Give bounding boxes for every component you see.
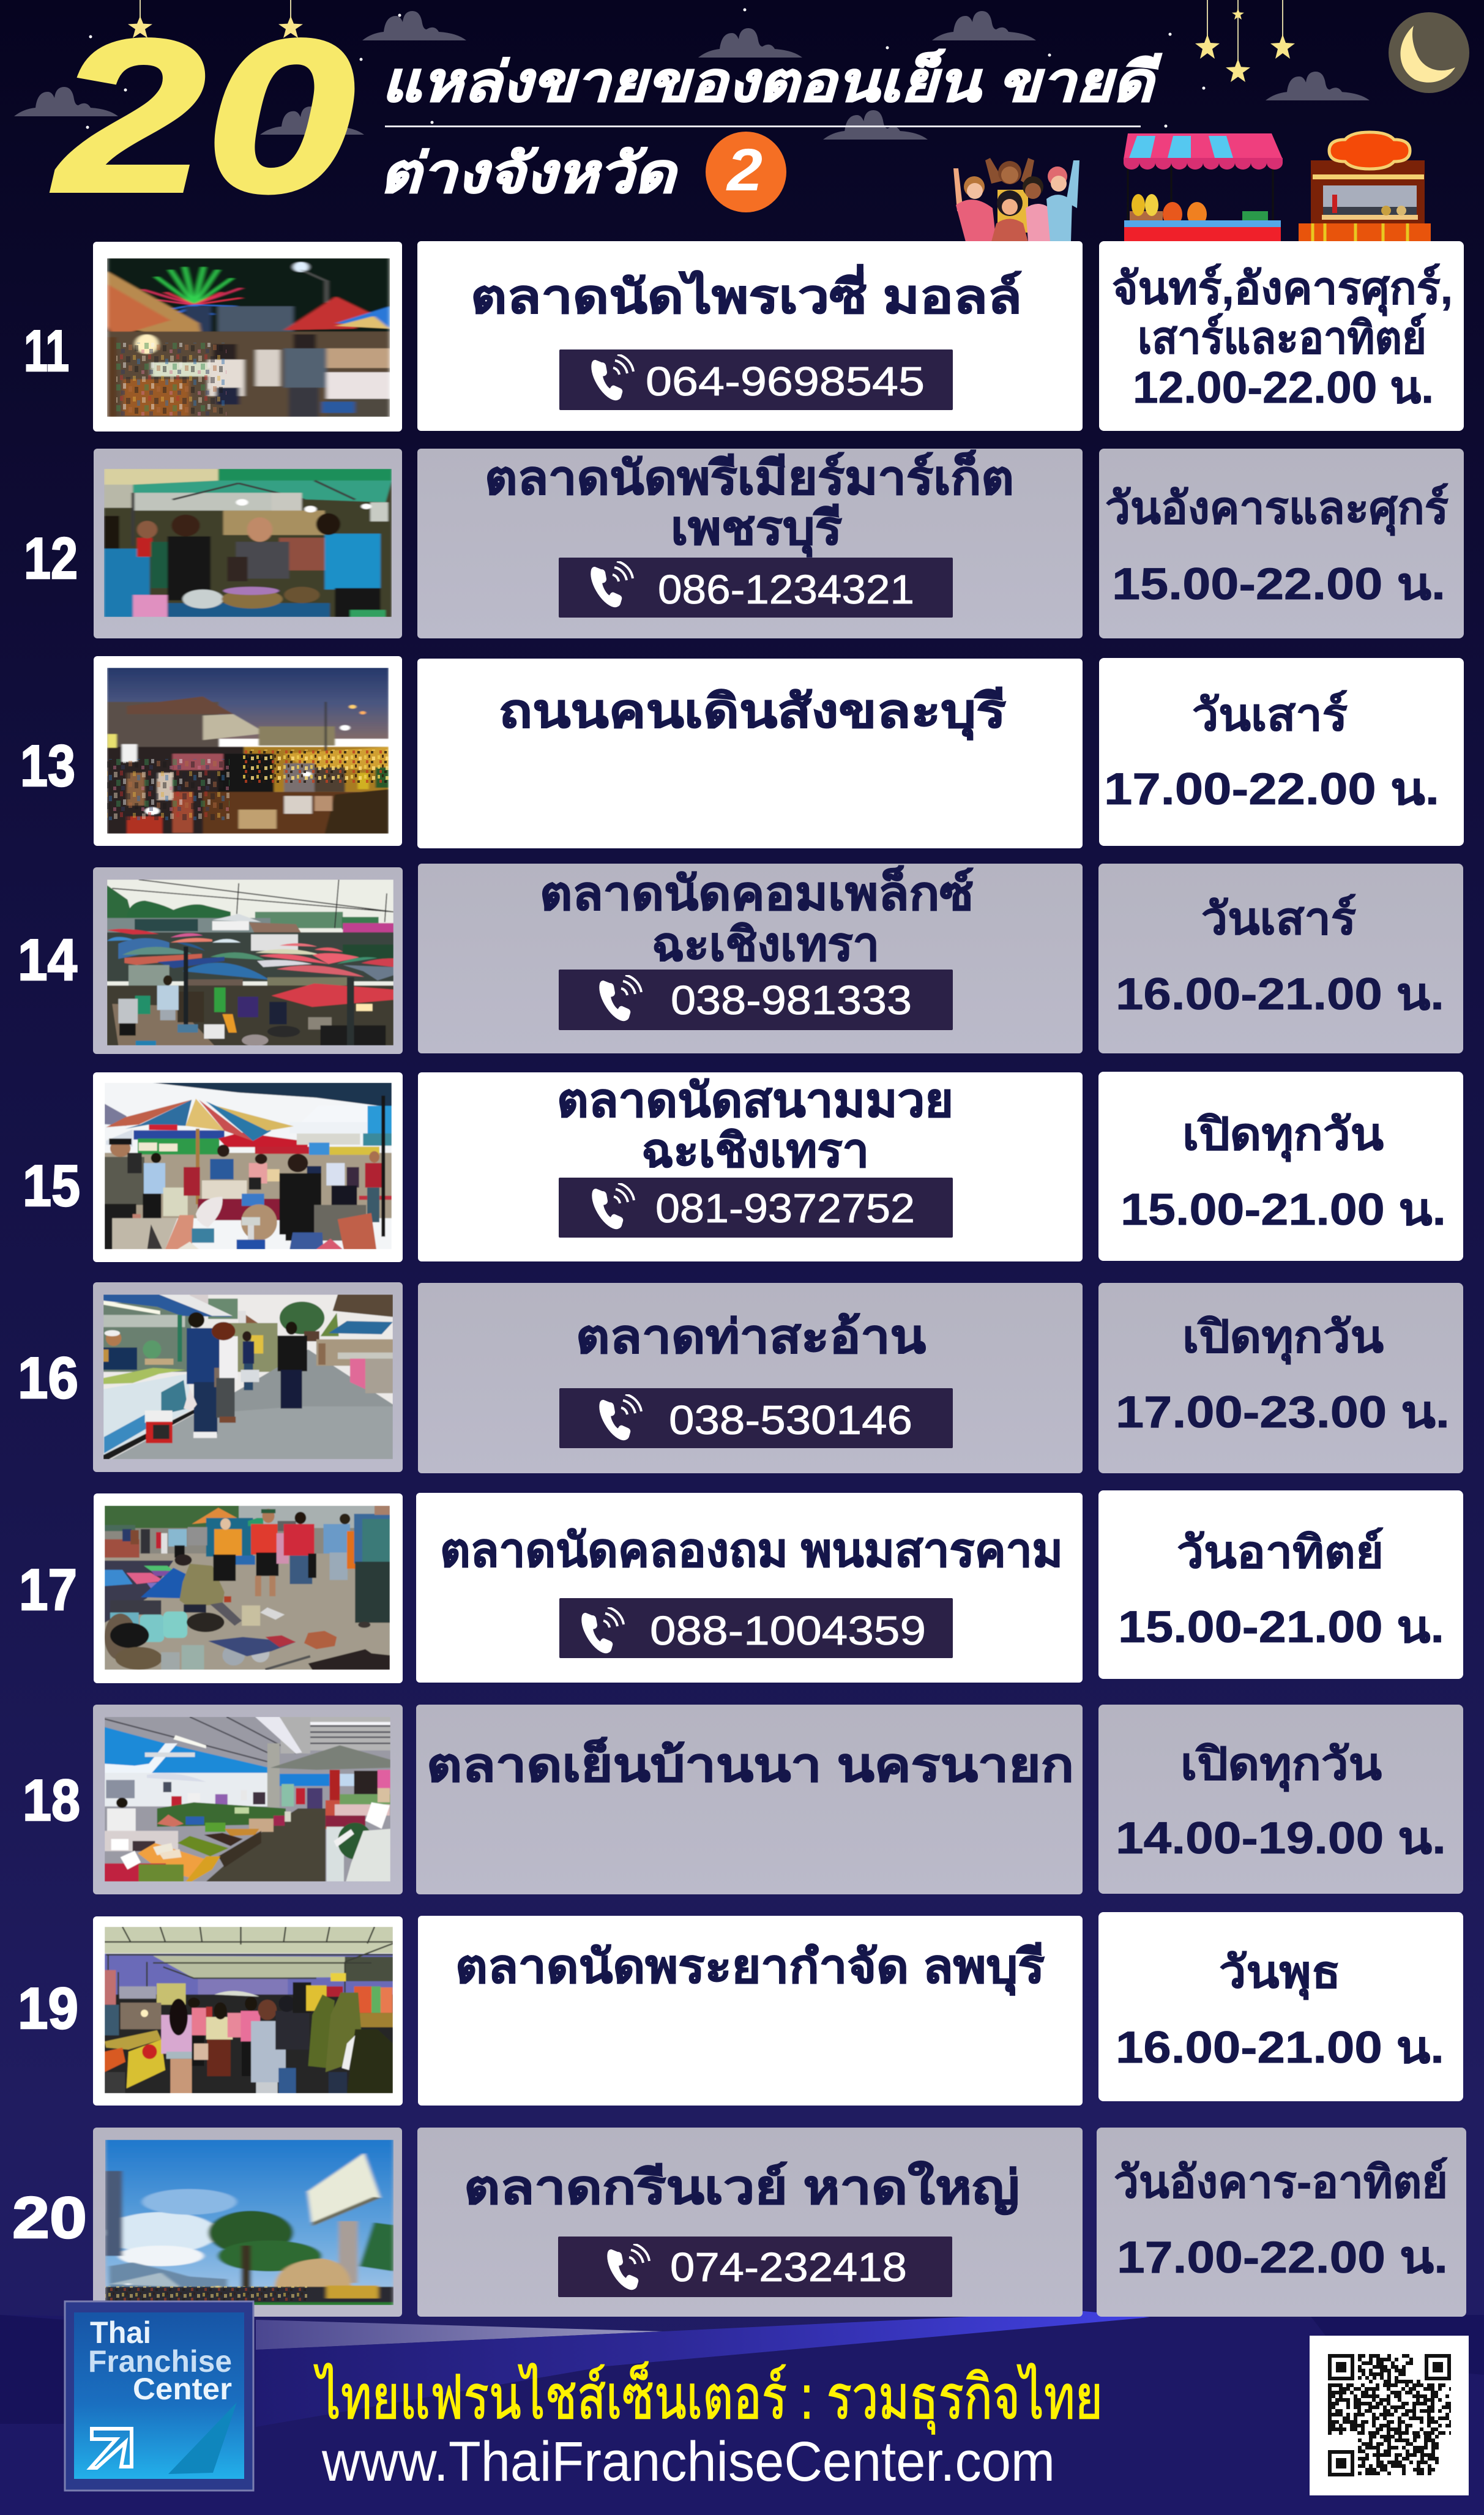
title card 16 [418,1283,1083,1473]
schedule card 15: 15.00-21.00 น. [1120,1185,1446,1235]
schedule card 19: 16.00-21.00 น. [1116,2023,1444,2072]
title card 18 [416,1705,1083,1894]
schedule card 12: 15.00-22.00 น. [1112,559,1445,609]
hanging stars right [1195,0,1295,82]
title line 1: แหล่งขายของตอนเย็น ขายดี [381,49,1162,113]
title card 20 [417,2128,1083,2317]
number 20: 20 [12,2185,87,2251]
row 19 [18,1912,1463,2106]
schedule card 20: วันอังคาร-อาทิตย์ [1114,2158,1448,2207]
icon: fruit stall [1124,133,1283,242]
number 14: 14 [18,927,77,993]
row 13 [20,656,1464,848]
market name 16: ตลาดท่าสะอ้าน [576,1311,926,1363]
part number badge [706,132,786,212]
schedule card 19: วันพุธ [1219,1948,1341,2000]
phone bar 16 [559,1388,953,1448]
phone bar 14 [559,970,953,1030]
market name 12 line 1: ตลาดนัดพรีเมียร์มาร์เก็ต [485,450,1014,504]
photo: stalls along a paved walkway [103,1295,393,1459]
title card 14 [418,864,1083,1053]
photo: walking street at dusk [107,668,389,834]
market name 12 line 2: เพชรบุรี [671,503,842,558]
row 17 [19,1490,1463,1683]
row 18 [23,1705,1463,1894]
logo: Thai Franchise Center [65,2301,253,2491]
market name 13: ถนนคนเดินสังขละบุรี [499,686,1006,741]
photo card 14 [93,867,403,1054]
schedule card 11 [1099,241,1464,431]
logo: Thai Franchise Center: Thai [90,2315,151,2350]
photo card 20 [93,2128,402,2317]
phone bar 12 [559,558,953,618]
number 11: 11 [24,318,69,384]
phone bar 12: 086-1234321 [658,567,914,613]
footer slogan: ไทยแฟรนไชส์เซ็นเตอร์ : รวมธุรกิจไทย [314,2361,1103,2435]
schedule card 16: 17.00-23.00 น. [1116,1388,1450,1437]
hanging stars left [128,0,303,38]
phone bar 17: 088-1004359 [650,1608,926,1654]
schedule card 15 [1098,1072,1463,1261]
phone bar 11 [559,349,953,410]
schedule card 19 [1098,1912,1463,2101]
market name 11: ตลาดนัดไพรเวซี่ มอลล์ [471,264,1022,323]
phone bar 20 [558,2237,952,2297]
schedule card 20 [1097,2128,1466,2317]
photo card 18 [93,1705,403,1894]
phone bar 16: 038-530146 [669,1397,912,1443]
schedule card 13 [1099,658,1464,846]
photo: market with colourful umbrellas [107,880,393,1045]
icon: moon [1389,12,1469,93]
schedule card 18 [1098,1705,1463,1894]
title card 13 [417,659,1083,848]
decorative clouds [14,9,1370,140]
photo card 12 [94,449,402,638]
schedule card 17: วันอาทิตย์ [1177,1528,1384,1577]
title card 15 [418,1072,1083,1261]
title line 2: ต่างจังหวัด [379,143,678,204]
photo: night market with ferris wheel [107,258,390,417]
photo: evening clothing market under canopy [105,1927,393,2093]
photo: market with rainbow umbrella [105,1083,392,1249]
schedule card 14: 16.00-21.00 น. [1116,970,1444,1019]
footer website url: www.ThaiFranchiseCenter.com [321,2431,1055,2493]
schedule card 11: จันทร์,อังคารศุกร์, [1112,264,1453,316]
number 13: 13 [20,733,75,799]
photo: flea market on the road [105,1506,390,1670]
row 16 [18,1282,1463,1473]
market name 15 line 2: ฉะเชิงเทรา [641,1125,869,1177]
number 12: 12 [24,526,78,591]
photo card 13 [94,656,402,846]
big number 20: 20 [52,0,355,237]
icon: cheering people [953,158,1079,242]
market name 19: ตลาดนัดพระยากำจัด ลพบุรี [455,1941,1045,1996]
number 17: 17 [19,1557,77,1623]
phone bar 15 [559,1178,953,1238]
market name 17: ตลาดนัดคลองถม พนมสารคาม [440,1525,1063,1577]
photo card 11 [93,242,402,432]
number 16: 16 [18,1345,78,1411]
photo: food vendors under green tent [104,469,392,617]
title rule [385,125,1141,127]
logo: Thai Franchise Center: Franchise [88,2344,232,2379]
photo card 15 [93,1072,403,1262]
market name 14 line 2: ฉะเชิงเทรา [652,919,879,971]
schedule card 14: วันเสาร์ [1201,894,1356,944]
icon: food stall [1299,132,1431,242]
schedule card 15: เปิดทุกวัน [1182,1110,1384,1162]
logo: Thai Franchise Center: Center [133,2372,232,2406]
market name 15 line 1: ตลาดนัดสนามมวย [557,1075,953,1127]
schedule card 16 [1098,1283,1463,1473]
title card 17 [416,1493,1083,1683]
phone bar 11: 064-9698545 [646,359,925,405]
QR code [1310,2336,1469,2495]
schedule card 18: เปิดทุกวัน [1180,1740,1382,1792]
phone bar 17 [559,1598,953,1658]
header [14,0,1469,242]
schedule card 14 [1098,864,1463,1053]
schedule card 11: เสาร์และอาทิตย์ [1138,313,1426,363]
number 18: 18 [23,1768,80,1833]
photo card 19 [93,1916,403,2106]
photo card 16 [93,1282,403,1472]
title card 19 [418,1916,1083,2106]
schedule card 12: วันอังคารและศุกร์ [1105,484,1449,536]
schedule card 13: 17.00-22.00 น. [1104,764,1439,814]
market name 20: ตลาดกรีนเวย์ หาดใหญ่ [464,2161,1020,2215]
schedule card 16: เปิดทุกวัน [1182,1312,1384,1365]
phone bar 15: 081-9372752 [655,1186,915,1231]
row 20 [12,2128,1466,2317]
schedule card 17 [1098,1490,1463,1679]
part number badge: 2 [726,136,763,203]
photo: covered fresh produce market [105,1717,390,1882]
schedule card 17: 15.00-21.00 น. [1118,1602,1444,1652]
row 11 [24,241,1464,432]
number 19: 19 [18,1976,78,2041]
schedule card 13: วันเสาร์ [1192,690,1348,740]
schedule card 18: 14.00-19.00 น. [1116,1814,1446,1863]
number 15: 15 [23,1153,80,1219]
title card 11 [417,241,1083,431]
title card 12 [417,449,1083,638]
footer band background [0,2311,1484,2515]
photo card 17 [94,1493,403,1683]
schedule card 11: 12.00-22.00 น. [1133,363,1434,413]
schedule card 12 [1099,449,1464,638]
row 14 [18,864,1463,1054]
schedule card 20: 17.00-22.00 น. [1117,2233,1448,2282]
phone bar 20: 074-232418 [670,2244,907,2290]
phone bar 14: 038-981333 [671,977,912,1023]
photo: shopping plaza under blue sky [105,2140,393,2305]
market name 14 line 1: ตลาดนัดคอมเพล็กซ์ [540,865,974,920]
row 15 [23,1072,1463,1262]
row 12 [24,449,1464,638]
market name 18: ตลาดเย็นบ้านนา นครนายก [427,1737,1074,1792]
